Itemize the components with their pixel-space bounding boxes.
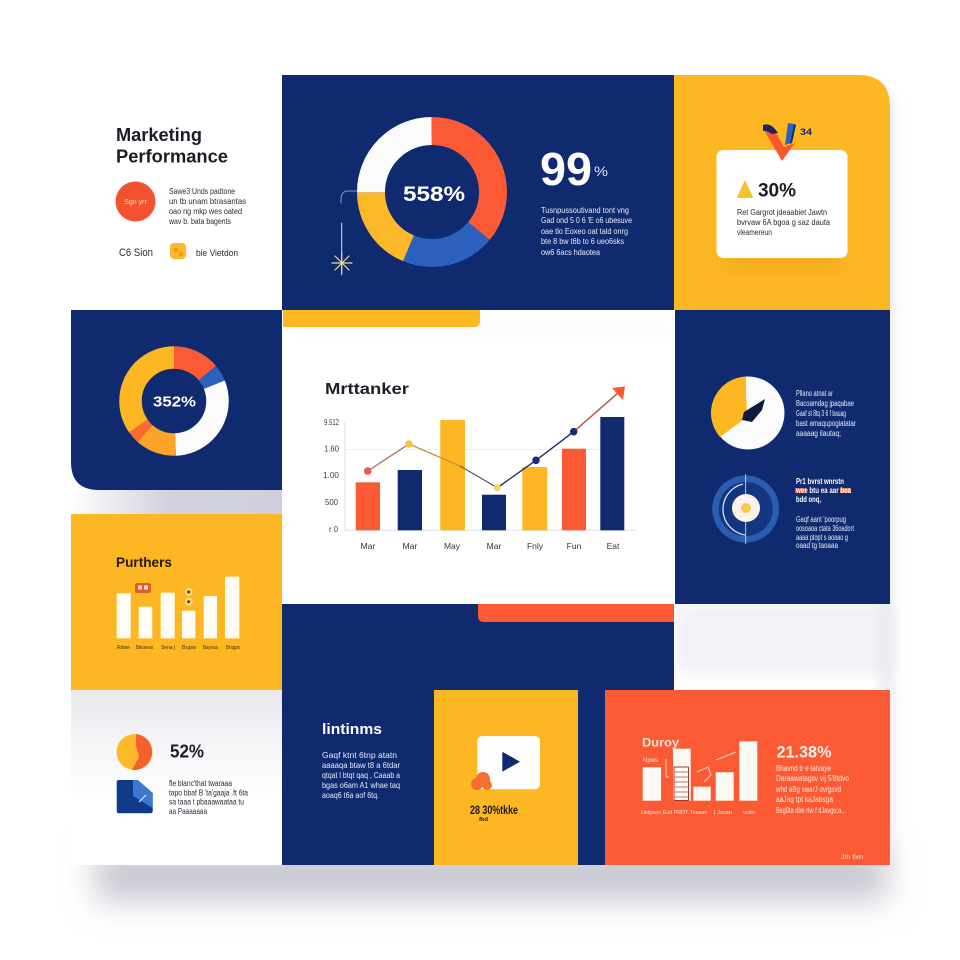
x axis labels: Mar [487, 541, 501, 551]
bar chart [643, 741, 757, 801]
title [116, 125, 228, 166]
percent: 30% [758, 180, 796, 202]
icon: orange badge: Sgn yrr [124, 199, 147, 206]
bar labels: Uetpsan Eud PRDT Tvasav [641, 810, 707, 816]
footer note: Jth flxn [841, 855, 863, 861]
chart heading: Duroy [642, 736, 679, 750]
pie chart [711, 376, 784, 450]
heading: lintinms [322, 721, 382, 738]
intro text [168, 187, 246, 226]
pie text [796, 389, 856, 438]
panel: partners [71, 514, 282, 690]
bars [356, 417, 624, 530]
icon: video player [477, 736, 540, 789]
body text: aaaaqa btaw t8 a 6tdar [322, 761, 400, 770]
percent: 52% [170, 742, 204, 762]
donut value: 558% [403, 183, 465, 206]
donut chart [371, 131, 493, 253]
panel: intro [71, 75, 282, 310]
y axis labels: r 0 [329, 525, 339, 534]
title: Marketing [116, 125, 202, 145]
radial callout text: wee btu ea aar bea [795, 486, 851, 495]
icon: burst [741, 503, 751, 513]
bar labels: Bragps [226, 645, 240, 651]
share text: sa taaa t pbaaawaataa tu [169, 798, 244, 806]
bar labels: Baynas [203, 645, 218, 651]
heading: Purthers [116, 555, 172, 570]
video stat: 28 30%tkke [470, 803, 518, 817]
striped bar detail [674, 767, 688, 800]
share text: fle blanc'that twaraaa [169, 779, 232, 788]
intro text: oao ng mkp wes oated [169, 207, 242, 216]
card text: Ret Gargrot jdeaabiet Jawtn [737, 208, 827, 217]
background shadows [70, 100, 892, 900]
panel: orange stats [605, 690, 890, 865]
chart: monthly performance [323, 381, 637, 551]
stat text: Tusnpussoutivand tont vng [541, 206, 629, 215]
trend line [368, 386, 625, 488]
icon: dark mark [742, 399, 765, 422]
bar chart [117, 577, 239, 638]
trend markers [364, 428, 578, 491]
radial body text: Gaqf aant 'poorpug [796, 515, 846, 524]
legend: first item: C6 Sion [119, 247, 153, 259]
pie text: Bacoamdag jpaqabae [796, 399, 854, 408]
stat text: Bsg0ta dbe rlw f dJavgu;a... [776, 806, 846, 815]
panel: chart background [283, 310, 674, 604]
yellow strip [283, 310, 480, 327]
bar labels [117, 645, 240, 651]
body text: qtqat l btqt qaq , Caaab a [322, 771, 400, 780]
donut chart [130, 358, 218, 444]
x axis labels: Fun [567, 541, 582, 551]
bar labels: Bupw [182, 645, 196, 651]
icon: check mark with pen [763, 123, 812, 161]
stat text: Bhavnd tr e tatvaye [776, 764, 831, 773]
video stat: fkd [479, 817, 488, 823]
pie text: aaaaag ilautaq; [796, 429, 841, 438]
body text: aoaq6 t6a aof 6tq. [322, 791, 379, 800]
donut value: 352% [153, 394, 196, 410]
pie chart [116, 734, 152, 770]
body text: bgas o6am A1 whae taq [322, 781, 400, 790]
radial body text: oaad tg taoaaa [796, 541, 838, 550]
x axis labels: May [444, 541, 461, 551]
radial callout text [795, 477, 851, 504]
icon: triangle [737, 180, 753, 198]
icon: blue tile [117, 780, 153, 813]
orange strip [478, 604, 674, 622]
panel: left donut [71, 310, 282, 490]
white card [716, 150, 848, 258]
pie text: Gaaf st 8tq 3 6 f bauag [796, 409, 846, 418]
share text: aa Paaaaaaa [169, 807, 207, 816]
stat text: whd aBg swarJ ovrgsvd [775, 785, 841, 794]
radial body text: oosoaoa ctata 36oadort [796, 524, 855, 533]
card text [737, 208, 831, 237]
share text: tapo bbaf B 'ta'gaaja .ft 6ta [169, 788, 248, 798]
y axis labels: 1.60 [324, 444, 340, 454]
intro text: wav b. bata bagents [168, 217, 231, 226]
stat text: ow6 6acs hdaotea [541, 248, 601, 257]
pie text: Pllano atnat ar [796, 389, 833, 398]
y axis labels: 500 [325, 498, 339, 507]
radial callout text: bdd onq, [796, 495, 821, 504]
radial body text [796, 515, 855, 550]
bar labels: Sena j [161, 645, 175, 651]
x axis labels: Mar [361, 541, 375, 551]
stat text [775, 764, 849, 815]
panel: video [434, 690, 578, 865]
big stat: % [594, 163, 608, 179]
icon: check mark with pen: 34 [800, 127, 812, 137]
title: Performance [116, 146, 228, 166]
icon: orange badge [116, 182, 156, 222]
stat text: oae tlo Eoxeo oat tald onrg [541, 227, 628, 236]
bar labels: Bdoness [136, 645, 153, 651]
chart title: Mrttanker [325, 381, 409, 398]
icon: orange cloud [471, 772, 492, 790]
radial callout text: Pr1 bvrst wnrstn [796, 477, 844, 486]
bar labels: Rdwe [117, 645, 130, 651]
icon: yellow square [170, 243, 186, 259]
card text: vleamereun [737, 228, 772, 237]
bar labels [641, 810, 755, 816]
panel: yellow card [674, 75, 890, 310]
bar labels: vuto [743, 810, 755, 816]
icon: sparkle with connector [332, 191, 357, 275]
intro text: un tb unam btrasantas [169, 197, 246, 206]
annotations [666, 752, 736, 782]
body text: Gaqf ktnt 6tnp atatn [322, 751, 397, 760]
panel: right navy [675, 310, 890, 604]
stat text: aaJag tpt kaJabsga [776, 795, 833, 804]
y axis labels: 1.00 [323, 471, 340, 480]
panel: share [71, 690, 282, 865]
stat text [541, 206, 632, 257]
x axis labels: Mar [403, 541, 417, 551]
video stat [470, 803, 518, 823]
y axis labels [323, 418, 340, 534]
body text [322, 751, 400, 800]
axes [345, 422, 637, 530]
share text [169, 779, 248, 816]
card text: bvrvaw 6A bgoa g saz dauta [737, 218, 831, 227]
big stat: 99 [540, 143, 592, 195]
icon: dots [185, 588, 193, 606]
annotation label: Npws [643, 758, 658, 764]
stat text: bte 8 bw t6b to 6 ueo6sks [541, 237, 624, 246]
stat text: Gad ond 5 0 6 'E o6 ubesuve [541, 216, 632, 225]
x axis labels: Eat [607, 541, 620, 551]
y axis labels: 9.512 [324, 418, 339, 427]
legend: second item: bie Vietdon [196, 248, 238, 258]
panel: insights navy [282, 604, 674, 865]
radial chart [712, 474, 779, 544]
pie text: bast amaqupogiatatar [796, 419, 856, 428]
x axis labels [361, 541, 620, 551]
icon: orange badge [135, 583, 151, 593]
x axis labels: Fnly [527, 541, 544, 551]
intro text: Sawe3 Unds padtone [169, 187, 235, 196]
stat value: 21.38% [776, 742, 832, 762]
stat text: Daraawatagsv vij 5'8tdvo [776, 774, 849, 783]
panel: main donut [282, 75, 674, 310]
bar labels: | Joran [714, 810, 732, 816]
radial body text: aaaa ptopt s aoaao g [796, 533, 848, 542]
